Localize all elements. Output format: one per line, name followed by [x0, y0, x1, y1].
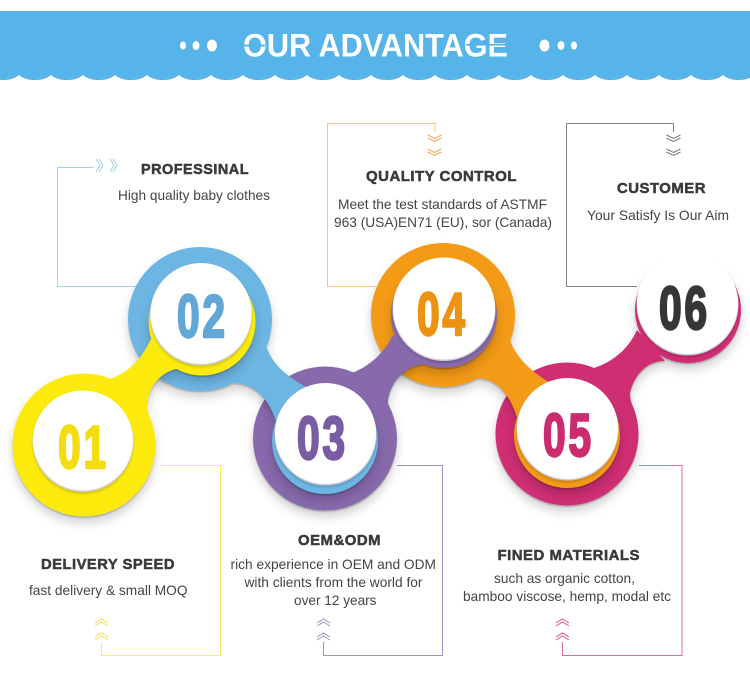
badge 06: 06: [659, 275, 710, 342]
title: OUR ADVANTAGE: [243, 28, 508, 64]
connector line: fined materials: [556, 466, 682, 656]
badge 04: [392, 258, 496, 361]
banner background: [0, 11, 750, 81]
banner scalloped edge: [0, 75, 750, 90]
text block: customer: Your Satisfy Is Our Aim: [587, 207, 729, 223]
chevrons: customer: [666, 135, 680, 156]
connector line: quality control: [328, 124, 442, 286]
badge 05: 05: [543, 402, 594, 469]
chevrons: delivery speed: [95, 619, 108, 640]
badge 05: [516, 378, 618, 480]
text block: quality control: QUALITY CONTROL: [366, 168, 517, 185]
chevrons: oem odm: [317, 619, 330, 640]
text block: quality control: Meet the test standards of ASTMF: [338, 196, 547, 212]
purple ring 03 with bridge to 04: [253, 262, 497, 510]
text block: delivery speed: DELIVERY SPEED: [41, 556, 175, 573]
badge 02: 02: [177, 283, 228, 350]
chevrons: quality control: [428, 135, 442, 156]
chevrons: professional: [96, 159, 117, 172]
yellow ring 01 with bridge to 02: [12, 268, 256, 516]
badge 04: 04: [417, 281, 468, 348]
badge 06: [636, 253, 738, 356]
badge 01: 01: [58, 414, 109, 481]
text block: quality control: [334, 168, 552, 230]
title dots right: [540, 40, 577, 52]
text block: quality control: 963 (USA)EN71 (EU), sor (Canada): [334, 214, 552, 230]
text block: customer: [587, 180, 729, 223]
title dots left: [180, 40, 217, 52]
text block: professional: [118, 161, 270, 203]
text block: delivery speed: [29, 556, 188, 598]
blue ring 02 with bridge to 03: [128, 247, 378, 494]
connector line: delivery speed: [95, 466, 220, 656]
orange ring 04 with bridge to 05: [371, 243, 620, 488]
text block: professional: High quality baby clothes: [118, 187, 270, 203]
text block: professional: PROFESSINAL: [141, 161, 249, 178]
text block: oem odm: over 12 years: [294, 592, 376, 608]
text block: oem odm: [230, 532, 436, 608]
connector line: oem odm: [317, 466, 442, 656]
text block: fined materials: bamboo viscose, hemp, modal etc: [463, 588, 671, 604]
chevrons: fined materials: [556, 619, 569, 640]
text block: customer: CUSTOMER: [617, 180, 706, 197]
badge 01: [32, 390, 134, 492]
connector line: professional: [58, 159, 137, 286]
text block: oem odm: rich experience in OEM and ODM: [230, 556, 436, 572]
text block: delivery speed: fast delivery & small MOQ: [29, 582, 188, 598]
header banner: [0, 11, 750, 81]
text block: oem odm: with clients from the world for: [244, 574, 423, 590]
text block: fined materials: [463, 547, 671, 604]
badge 03: [274, 383, 376, 486]
badge 03: 03: [297, 405, 348, 472]
pink ring 05 with bridge to 06: [496, 257, 741, 506]
text block: oem odm: OEM&ODM: [298, 532, 381, 549]
text block: fined materials: FINED MATERIALS: [498, 547, 640, 564]
badge 02: [150, 263, 252, 366]
text block: fined materials: such as organic cotton,: [494, 570, 635, 586]
connector line: customer: [566, 124, 680, 286]
